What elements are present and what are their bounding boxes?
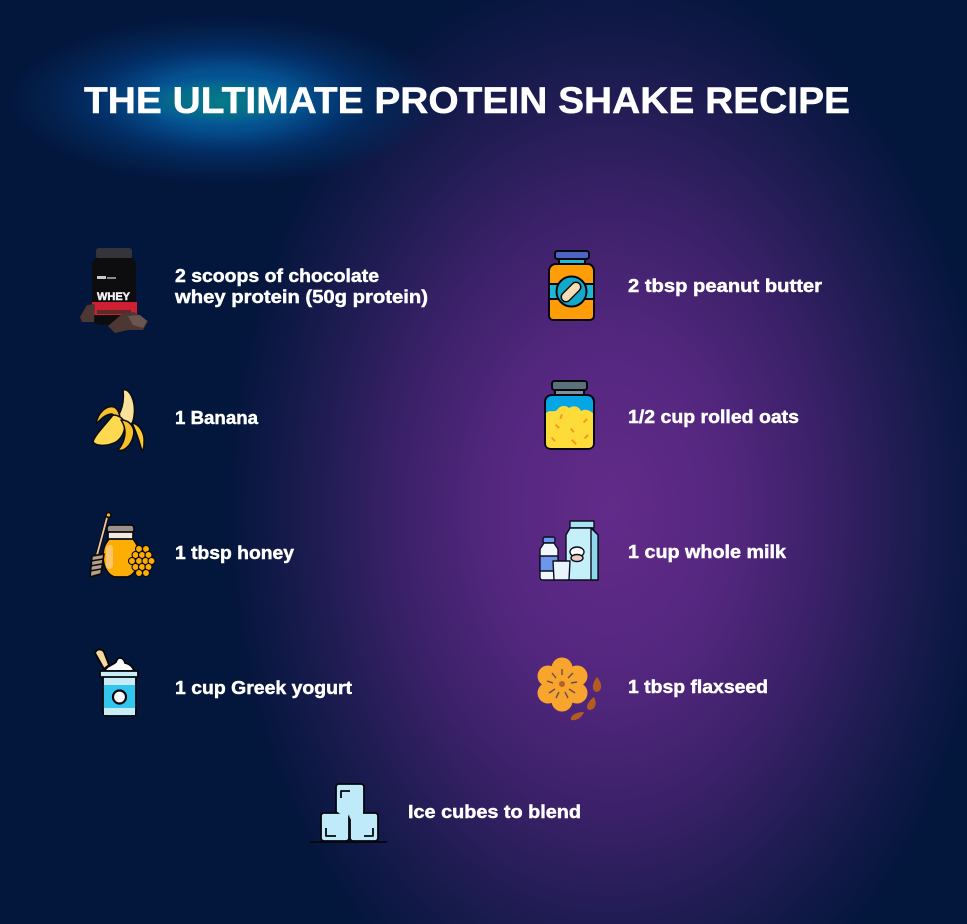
icon: oats jar (545, 381, 594, 449)
icon: banana (93, 390, 144, 451)
icon: milk carton, bottle and glass (540, 521, 598, 580)
label: 1/2 cup rolled oats (628, 406, 799, 427)
ingredient: whey protein (80, 248, 428, 333)
label: Ice cubes to blend (408, 801, 581, 822)
icon: yogurt cup (95, 650, 138, 716)
icon: honey jar with dipper and comb (90, 512, 139, 577)
icon: flax flower and seeds (538, 658, 601, 720)
ingredient: whole milk (540, 521, 787, 580)
label: 1 tbsp honey (175, 542, 295, 563)
ingredient: greek yogurt (95, 650, 352, 716)
ingredient: banana (93, 390, 259, 451)
ingredient: peanut butter (549, 251, 822, 320)
label: 2 scoops of chocolate (175, 265, 379, 286)
label: 1 cup whole milk (628, 541, 787, 562)
ingredient: ice cubes (310, 784, 581, 842)
ingredient: whey protein: whey protein (50g protein) (174, 286, 428, 307)
ingredient: honey (90, 512, 295, 577)
icon: ice cubes (310, 784, 387, 842)
background blue title glow (5, 15, 445, 185)
title: THE ULTIMATE PROTEIN SHAKE RECIPE (84, 80, 850, 121)
label: 1 tbsp flaxseed (628, 676, 768, 697)
product name: WHEY (97, 291, 131, 303)
ingredient: flaxseed (538, 658, 768, 720)
label: 1 cup Greek yogurt (175, 677, 352, 698)
label: 2 tbsp peanut butter (628, 275, 822, 296)
label: 1 Banana (175, 407, 259, 428)
icon: peanut butter jar (549, 251, 594, 320)
ingredient: rolled oats (545, 381, 799, 449)
icon: whey protein tub with chocolate (80, 248, 148, 333)
